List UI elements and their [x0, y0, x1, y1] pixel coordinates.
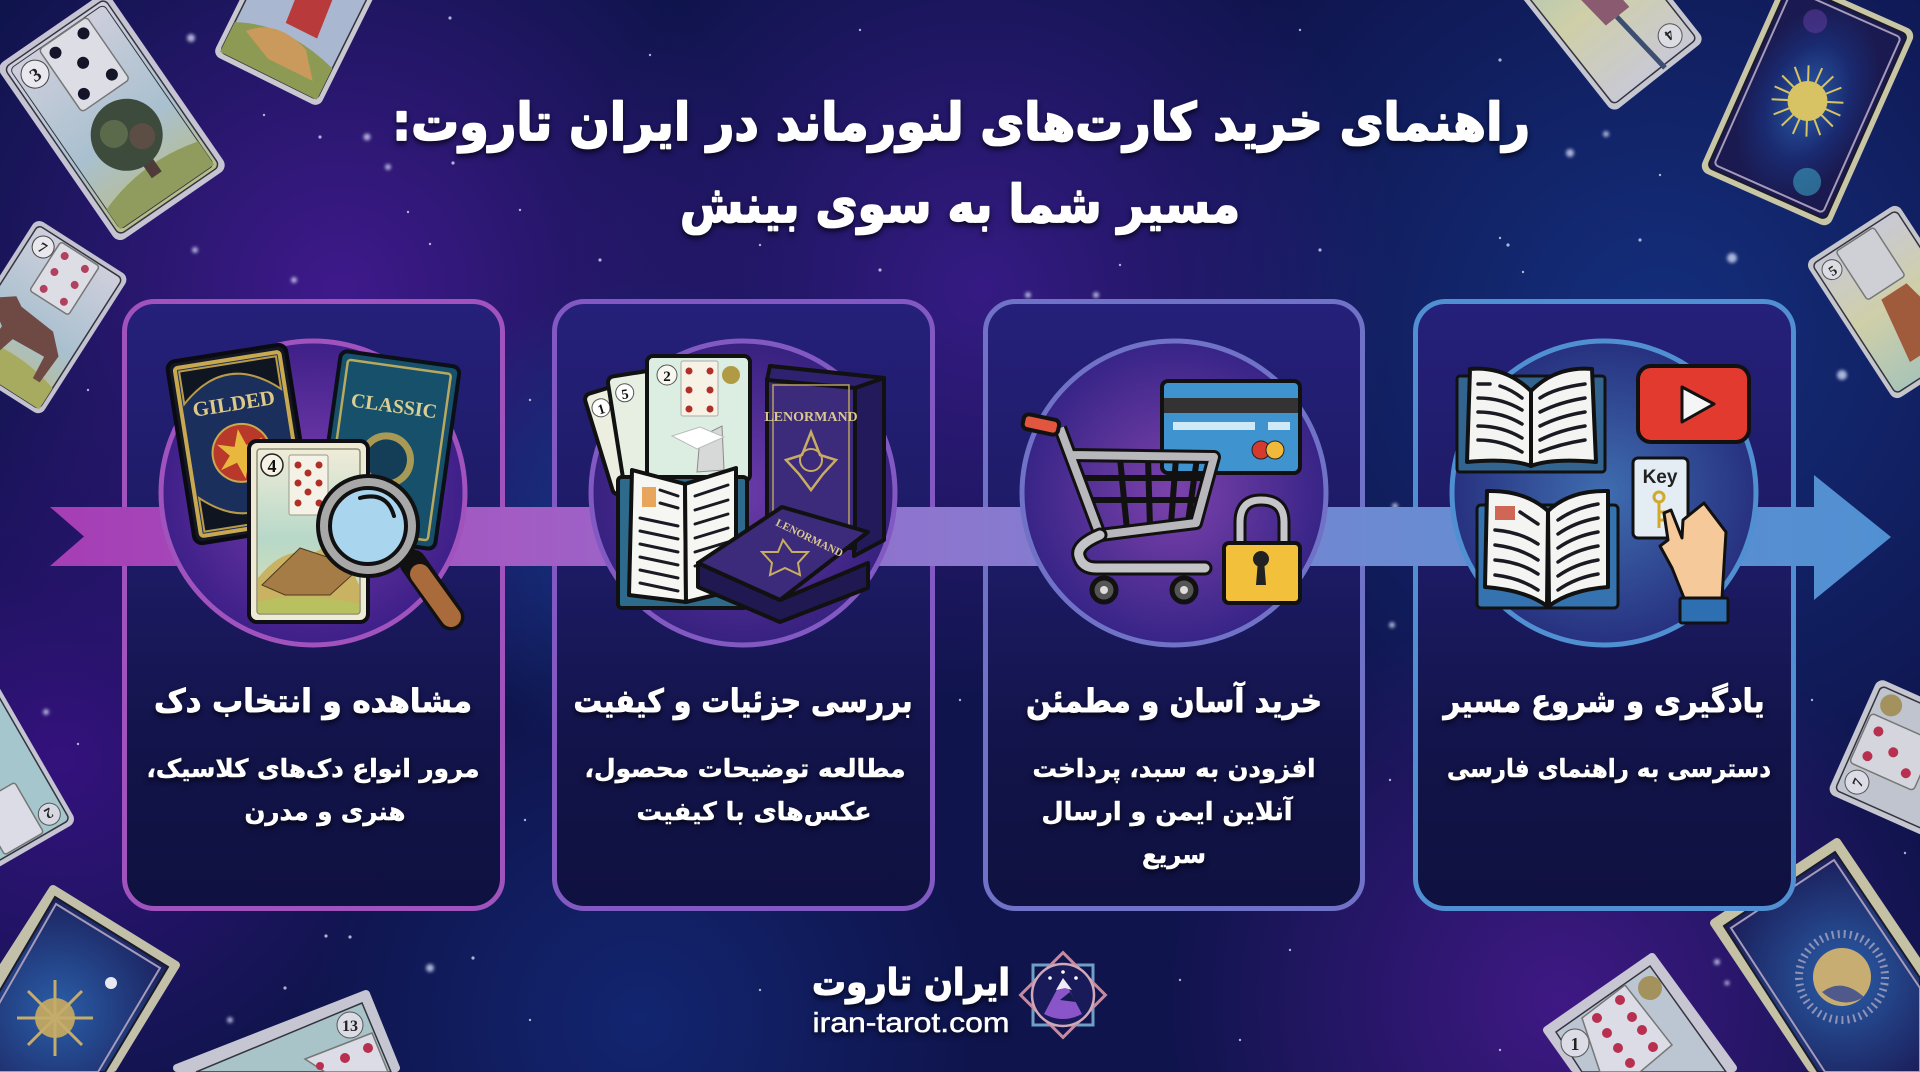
icon: fan of lenormand cards — [584, 356, 750, 496]
body text: step 3 — [1032, 754, 1316, 870]
icon: lenormand card number 4 — [249, 441, 368, 622]
title — [392, 93, 1530, 235]
icon: lenormand card number 4: 4 — [268, 456, 276, 476]
circle: step 1 — [161, 341, 465, 645]
icon: fan of lenormand cards: 5 — [620, 387, 630, 403]
panel: step 1 background — [124, 302, 502, 908]
icon: flat lenormand box — [698, 507, 868, 622]
circle: step 4 — [1452, 341, 1756, 645]
circle: step 2 — [591, 341, 895, 645]
decorative card: right figure: 5 — [1826, 264, 1840, 280]
panel: step 2 background — [554, 302, 932, 908]
panel: step 3 background — [986, 302, 1362, 908]
icon: key card and hand: Key — [1643, 467, 1678, 488]
decorative card: number 7 horse — [0, 218, 129, 416]
step 1 content — [146, 341, 480, 827]
icon: upright lenormand box: LENORMAND — [764, 410, 858, 425]
heading: step 1: مشاهده و انتخاب دک — [154, 682, 472, 720]
heading: step 4: یادگیری و شروع مسیر — [1442, 682, 1764, 720]
body text: step 1: مرور انواع دک‌های کلاسیک، — [146, 754, 480, 784]
decorative card: bottom right number 1 — [1547, 957, 1733, 1072]
circle: step 3 — [1022, 341, 1326, 645]
icon: top open book — [1457, 369, 1605, 472]
step 4 content — [1442, 341, 1771, 784]
title: راهنمای خرید کارت‌های لنورماند در ایران تاروت: — [392, 93, 1530, 153]
icon: padlock — [1224, 500, 1300, 603]
body text: step 2: مطالعه توضیحات محصول، — [584, 754, 906, 784]
icon: open guide book — [618, 468, 747, 608]
decorative card: bottom left number 13 — [177, 994, 396, 1072]
icon: fan of lenormand cards: 2 — [663, 369, 671, 385]
icon: key card and hand — [1633, 458, 1728, 623]
decorative card: tarot rider top — [212, 0, 404, 108]
decorative card: number 3 tree: 3 — [26, 64, 46, 87]
heading: step 2: بررسی جزئیات و کیفیت — [574, 682, 912, 720]
body text: step 4: دسترسی به راهنمای فارسی — [1447, 754, 1771, 784]
icon: upright lenormand box — [764, 366, 884, 556]
icon: classic card — [316, 351, 460, 549]
timeline arrow ribbon — [50, 475, 1891, 600]
icon: credit card — [1162, 381, 1300, 473]
decorative card: number 7 horse: 7 — [35, 240, 50, 258]
icon: magnifying glass — [324, 482, 451, 617]
panel: step 4 background — [1416, 302, 1794, 908]
body text: step 2 — [584, 754, 906, 826]
logo: brand name and url: iran-tarot.com — [812, 1007, 1010, 1038]
step 3 content — [1022, 341, 1326, 870]
decorative card: right figure — [1805, 203, 1920, 401]
body text: step 3: سریع — [1142, 840, 1206, 870]
logo: brand name and url — [812, 961, 1010, 1038]
decorative card: right lower number 7 — [1827, 678, 1920, 874]
decorative card: wand top right — [1495, 0, 1705, 113]
icon: shopping cart — [1022, 413, 1214, 602]
step panels — [124, 302, 1794, 908]
body text: step 1: هنری و مدرن — [244, 797, 406, 827]
heading: step 3: خرید آسان و مطمئن — [1026, 681, 1322, 720]
body text: step 3: افزودن به سبد، پرداخت — [1032, 754, 1316, 784]
decorative card: wand top right: 4 — [1661, 26, 1677, 43]
step 2 content — [574, 341, 912, 826]
decorative card: sun and moon back bottom right — [1714, 842, 1920, 1072]
decorative card: left lower number 2 — [0, 679, 77, 877]
icon: classic card: CLASSIC — [350, 389, 438, 423]
decorative card: right lower number 7: 7 — [1850, 776, 1868, 790]
body text: step 1 — [146, 754, 480, 827]
icon: fan of lenormand cards: 1 — [596, 402, 607, 418]
decorative card: sun back bottom left — [0, 889, 176, 1072]
icon: gilded card: GILDED — [191, 385, 277, 422]
body text: step 2: عکس‌های با کیفیت — [636, 797, 872, 826]
decorative card: number 3 tree — [0, 0, 228, 244]
decorative card: bottom right number 1: 1 — [1570, 1034, 1580, 1054]
decorative card: bottom left number 13: 13 — [342, 1018, 358, 1035]
decorative card: left lower number 2: 2 — [41, 804, 56, 821]
icon: logo emblem — [1021, 953, 1105, 1037]
icon: flat lenormand box: LENORMAND — [774, 517, 845, 560]
icon: gilded card — [167, 344, 314, 544]
icon: video play button — [1638, 366, 1749, 442]
icon: bottom open book — [1477, 491, 1618, 608]
body text: step 3: آنلاین ایمن و ارسال — [1042, 796, 1294, 827]
title: مسیر شما به سوی بینش — [680, 175, 1240, 235]
logo: brand name and url: ایران تاروت — [812, 961, 1010, 1004]
decorative card: sun back top right — [1699, 0, 1916, 228]
